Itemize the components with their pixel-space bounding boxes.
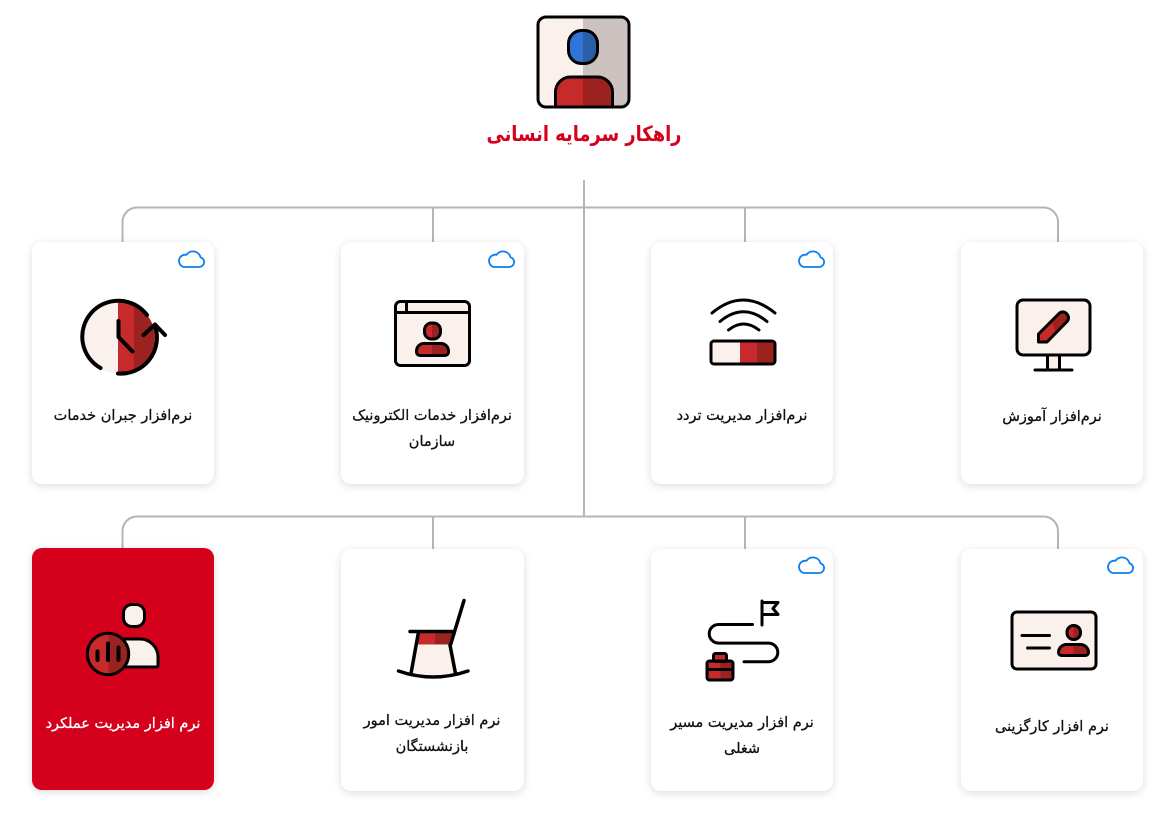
label: نرم‌افزار مدیریت تردد bbox=[677, 408, 807, 424]
icon: cloud bbox=[1107, 556, 1134, 574]
card: retirees software bbox=[341, 549, 524, 791]
icon: cloud bbox=[798, 250, 825, 268]
card: performance management software (highlighted) bbox=[32, 548, 214, 790]
card: training software bbox=[961, 242, 1143, 484]
label: نرم افزار مدیریت عملکرد bbox=[46, 716, 200, 732]
label: نرم افزار کارگزینی bbox=[995, 719, 1109, 735]
label: سازمان bbox=[409, 434, 455, 450]
label: نرم‌افزار جبران خدمات bbox=[54, 408, 192, 424]
icon: career path bbox=[706, 600, 780, 682]
label bbox=[352, 408, 512, 450]
label: نرم‌افزار خدمات الکترونیک bbox=[352, 408, 512, 424]
label bbox=[362, 713, 500, 755]
icon: cloud bbox=[798, 556, 825, 574]
icon: wifi reader bbox=[710, 298, 777, 366]
label: نرم افزار مدیریت امور bbox=[364, 713, 500, 729]
card: organization e-services software bbox=[341, 242, 524, 484]
card: compensation software bbox=[32, 242, 214, 484]
icon: clock bbox=[80, 298, 168, 376]
icon: browser with user bbox=[394, 300, 471, 367]
icon: monitor with pencil bbox=[1016, 298, 1092, 372]
card: recruitment software bbox=[961, 549, 1143, 791]
card: attendance software bbox=[651, 242, 833, 484]
label: شغلی bbox=[724, 741, 760, 757]
title: راهکار سرمایه انسانی bbox=[487, 122, 681, 146]
icon: cloud bbox=[178, 250, 205, 268]
card: career path software bbox=[651, 549, 833, 791]
label bbox=[670, 715, 814, 757]
icon: id card bbox=[1010, 610, 1098, 670]
icon: cloud bbox=[488, 250, 515, 268]
label: نرم‌افزار آموزش bbox=[1002, 409, 1102, 425]
label: بازنشستگان bbox=[396, 739, 468, 755]
label: نرم افزار مدیریت مسیر bbox=[670, 715, 814, 731]
icon: person with chart bbox=[86, 603, 160, 676]
icon: rocking chair bbox=[396, 598, 470, 679]
icon: main person bbox=[536, 16, 630, 108]
